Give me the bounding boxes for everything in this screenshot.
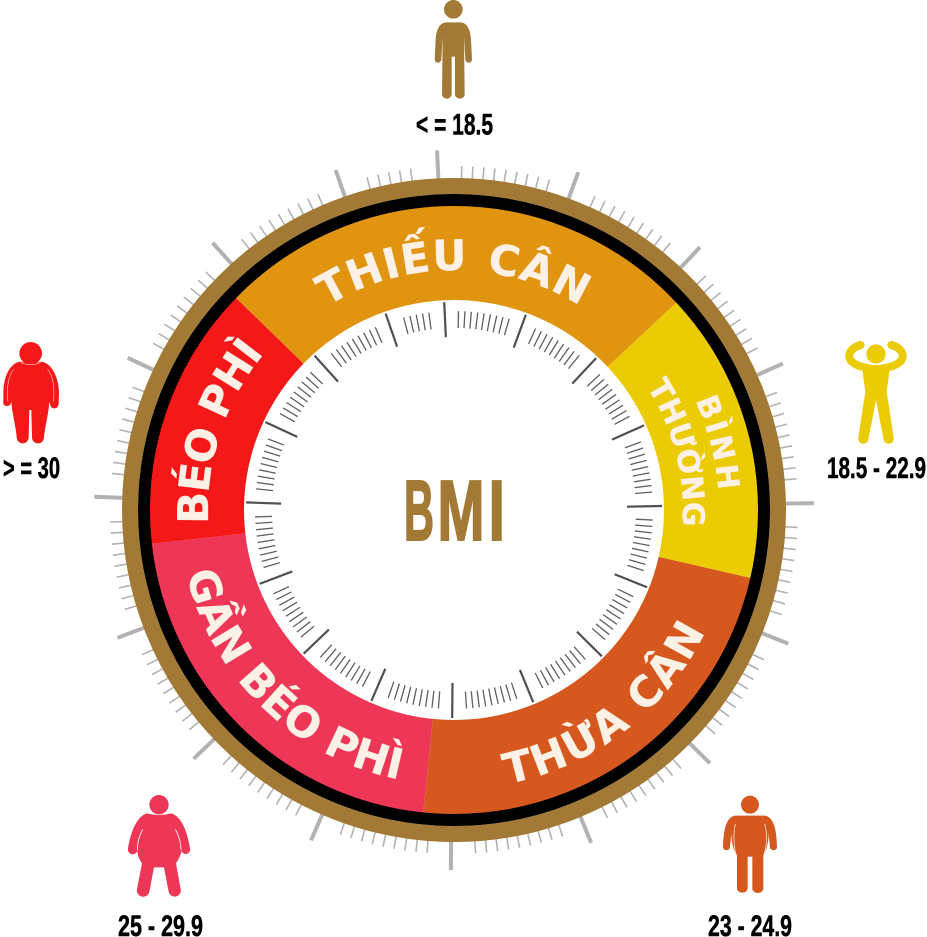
icon: obese person xyxy=(3,342,59,443)
brown outer ring xyxy=(130,186,778,834)
label: THỪA CÂN: THỪA CÂN xyxy=(500,620,704,782)
value: underweight range: < = 18.5 xyxy=(416,108,493,142)
value: obese range: > = 30 xyxy=(3,452,60,485)
segment: Béo phì xyxy=(149,297,304,544)
segment: Thiếu cân xyxy=(235,205,677,367)
icon: normal person flexing xyxy=(849,344,903,444)
center title: BMI: I xyxy=(488,464,505,559)
icon: overweight person xyxy=(723,796,777,893)
center title: BMI xyxy=(404,464,505,559)
outer tick ring xyxy=(78,145,828,885)
inner tick ring xyxy=(237,299,670,727)
label: THƯỜNG: THƯỜNG xyxy=(650,375,706,524)
label: GẦN BÉO PHÌ: GẦN BÉO PHÌ xyxy=(190,570,403,779)
center title: BMI: M xyxy=(438,464,484,559)
icon: pre-obese person xyxy=(128,795,190,897)
label: THIẾU CÂN: THIẾU CÂN xyxy=(312,226,592,304)
segment: Thừa cân xyxy=(423,557,751,815)
label: BÌNH: BÌNH xyxy=(696,394,740,488)
black ring xyxy=(144,200,764,820)
center title: BMI: B xyxy=(404,464,434,559)
segment: Gần béo phì xyxy=(151,533,433,813)
icon: underweight person xyxy=(435,0,472,99)
segment: Bình thường xyxy=(608,302,759,578)
label: BÉO PHÌ: BÉO PHÌ xyxy=(171,336,262,520)
